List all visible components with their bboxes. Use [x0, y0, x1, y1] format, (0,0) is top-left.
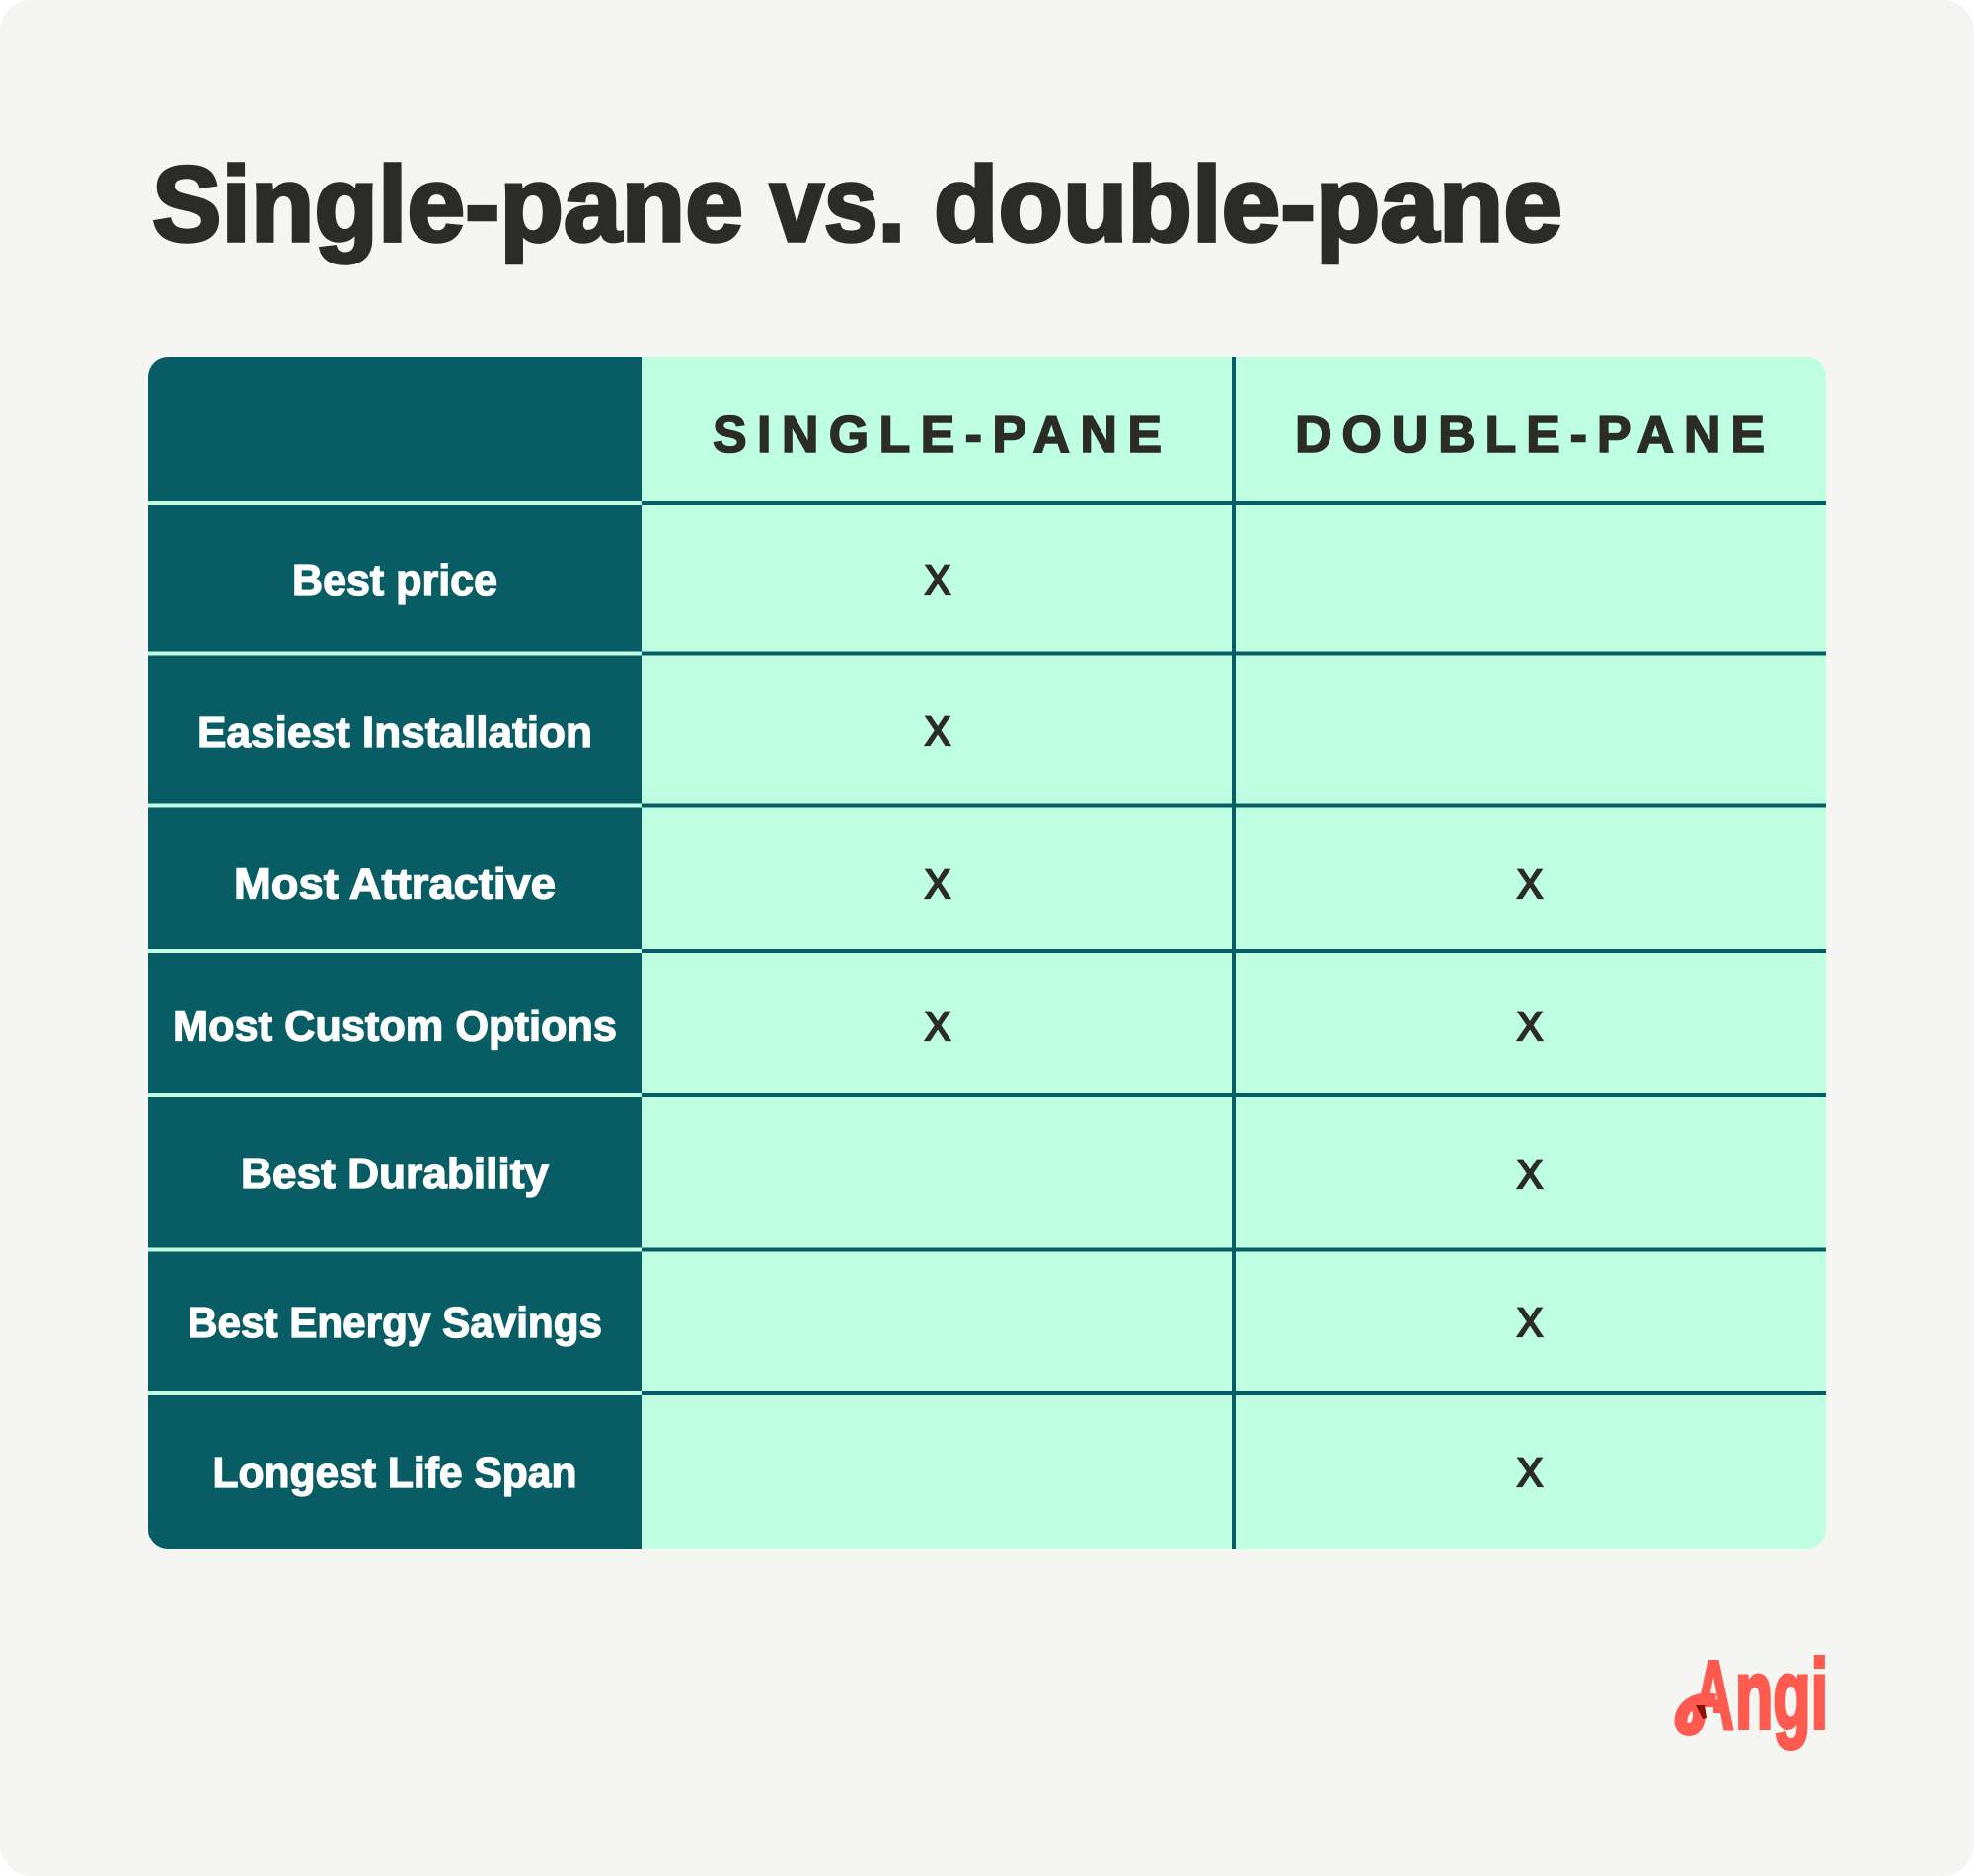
title: Single-pane	[152, 144, 743, 263]
row: longest life span	[213, 1449, 1543, 1497]
row: most custom options	[173, 1003, 1543, 1050]
logo: Angi: A	[1693, 1640, 1734, 1750]
row: easiest installation: X	[925, 709, 950, 754]
row: longest life span: X	[1517, 1450, 1543, 1495]
row: most attractive: X	[1517, 862, 1543, 907]
row: best price	[292, 557, 950, 605]
title: double-pane	[934, 144, 1562, 263]
row: best durability: X	[1517, 1152, 1543, 1197]
row: best durability: Best Durability	[241, 1150, 550, 1198]
row: best energy savings: X	[1517, 1300, 1543, 1345]
title	[152, 144, 1562, 263]
row: most attractive: X	[925, 862, 950, 907]
logo: Angi	[1674, 1655, 1825, 1751]
row: best durability	[241, 1150, 1543, 1198]
row: easiest installation	[197, 709, 950, 757]
row: best energy savings: Best Energy Savings	[188, 1299, 602, 1347]
logo: Angi: ngi	[1735, 1639, 1828, 1749]
comparison table	[148, 357, 1826, 1549]
row: most attractive: Most Attractive	[234, 861, 556, 908]
row: best price: X	[925, 558, 950, 603]
row: easiest installation: Easiest Installation	[197, 709, 592, 757]
row: most custom options: Most Custom Options	[173, 1003, 617, 1050]
row: longest life span: Longest Life Span	[213, 1449, 576, 1497]
column heading: single-pane: SINGLE-PANE	[713, 407, 1162, 464]
row: most custom options: X	[1517, 1004, 1543, 1049]
row: best energy savings	[188, 1299, 1543, 1347]
column heading: double-pane: DOUBLE-PANE	[1295, 407, 1765, 464]
row: best price: Best price	[292, 557, 497, 605]
row: most attractive	[234, 861, 1543, 908]
row: most custom options: X	[925, 1004, 950, 1049]
title: vs.	[770, 144, 905, 263]
